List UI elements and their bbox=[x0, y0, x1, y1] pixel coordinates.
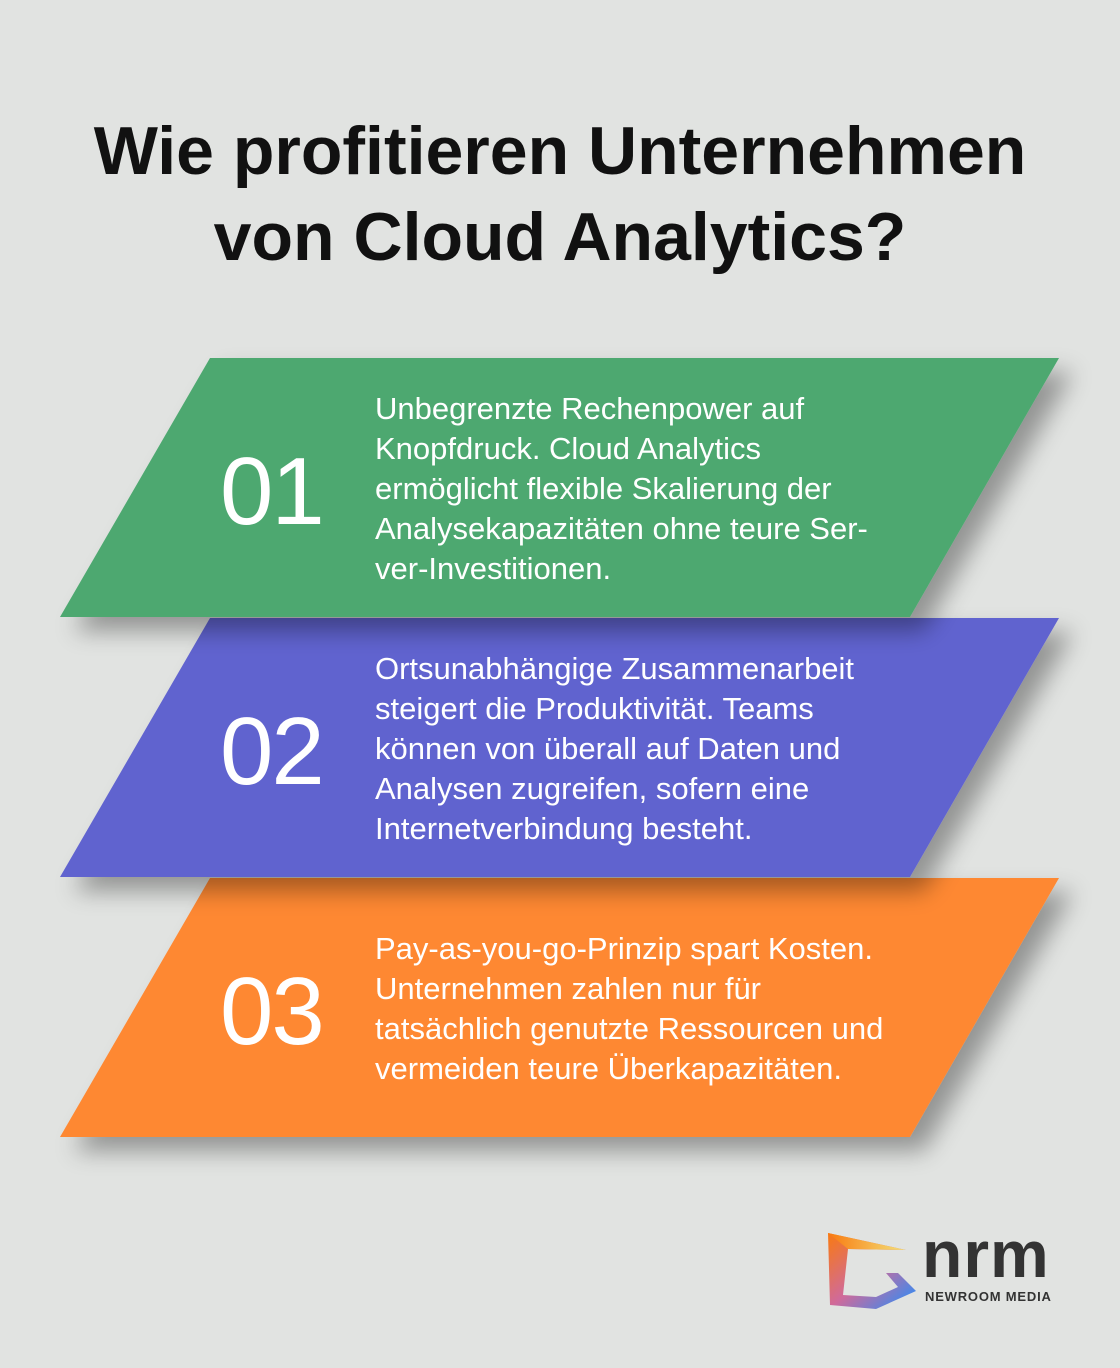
text 02: Ortsunabhängige Zusammenarbeit bbox=[375, 651, 854, 686]
text 02: können von überall auf Daten und bbox=[375, 731, 840, 766]
text 01: Analysekapazitäten ohne teure Ser- bbox=[375, 511, 868, 546]
logo subtitle: NEWROOM MEDIA bbox=[925, 1289, 1052, 1304]
number 01: 01 bbox=[220, 438, 323, 545]
number 02: 02 bbox=[220, 698, 323, 805]
band 1 bbox=[60, 358, 1059, 617]
band 3 bbox=[60, 878, 1059, 1137]
title: Wie profitieren Unternehmen bbox=[94, 113, 1026, 189]
text 03: Pay-as-you-go-Prinzip spart Kosten. bbox=[375, 931, 873, 966]
text 03 bbox=[375, 931, 883, 1086]
text 02: steigert die Produktivität. Teams bbox=[375, 691, 814, 726]
icon: logo mark bbox=[828, 1233, 916, 1309]
text 02 bbox=[375, 651, 854, 846]
text 01: ver-Investitionen. bbox=[375, 551, 611, 586]
text 01: Knopfdruck. Cloud Analytics bbox=[375, 431, 761, 466]
text 01: Unbegrenzte Rechenpower auf bbox=[375, 391, 804, 426]
text 02: Analysen zugreifen, sofern eine bbox=[375, 771, 809, 806]
text 03: vermeiden teure Überkapazitäten. bbox=[375, 1051, 842, 1086]
band 2 bbox=[60, 618, 1059, 877]
logo bbox=[828, 1217, 1052, 1309]
text 03: Unternehmen zahlen nur für bbox=[375, 971, 761, 1006]
title bbox=[94, 113, 1026, 275]
logo text: nrm bbox=[922, 1217, 1050, 1291]
text 02: Internetverbindung besteht. bbox=[375, 811, 752, 846]
text 01: ermöglicht flexible Skalierung der bbox=[375, 471, 832, 506]
title: von Cloud Analytics? bbox=[214, 199, 906, 275]
text 03: tatsächlich genutzte Ressourcen und bbox=[375, 1011, 883, 1046]
number 03: 03 bbox=[220, 958, 323, 1065]
text 01 bbox=[375, 391, 868, 586]
